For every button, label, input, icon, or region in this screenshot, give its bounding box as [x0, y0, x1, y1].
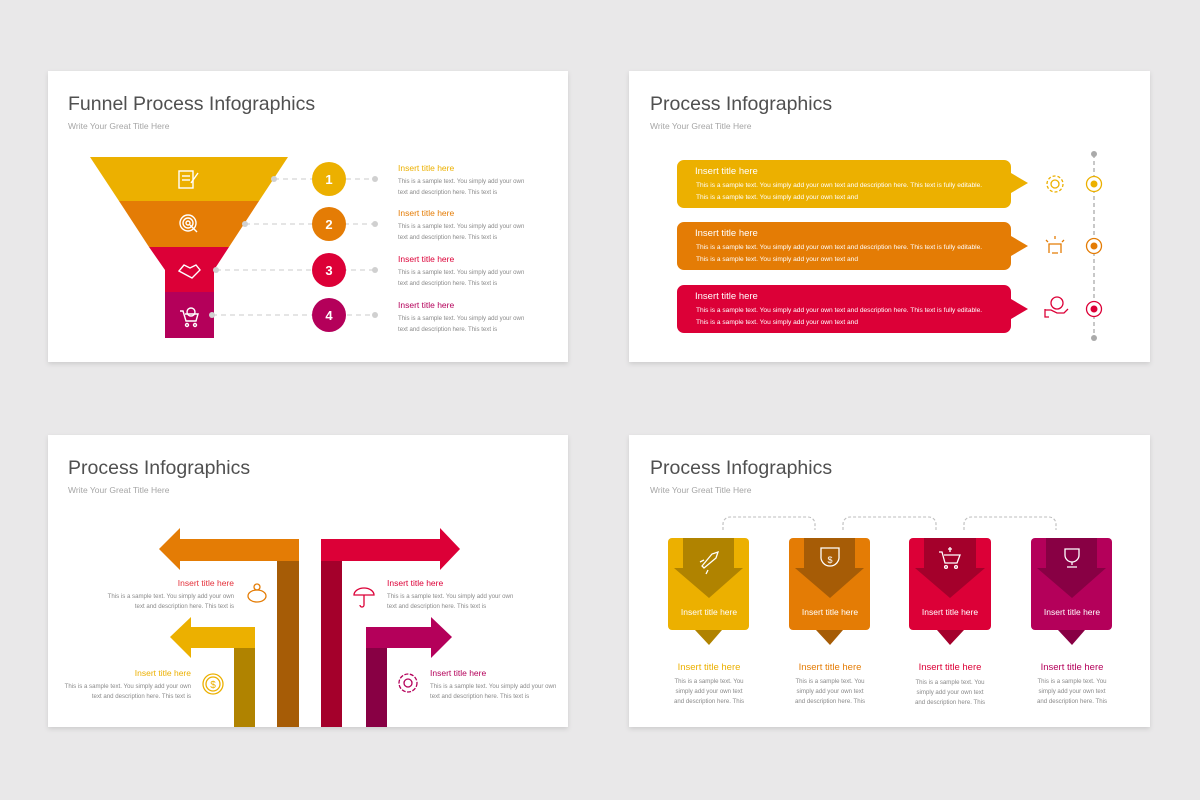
heading: arrows title [68, 457, 250, 495]
funnel text blocks: This is a sample text. You simply add your own [398, 315, 524, 322]
funnel text blocks: This is a sample text. You simply add your own [398, 269, 524, 276]
heading: cards title [650, 457, 832, 495]
arrow text blocks and icons: Insert title here [178, 578, 234, 588]
arrow shapes [159, 528, 460, 727]
panel: arrows process [48, 435, 568, 727]
callout boxes: This is a sample text. You simply add your own text and [696, 319, 858, 326]
card text blocks: and description here. This [674, 698, 744, 705]
cards: Insert title here [922, 607, 978, 617]
funnel text blocks: Insert title here [398, 163, 454, 173]
card text blocks: and description here. This [795, 698, 865, 705]
panel: card process [629, 435, 1150, 727]
arrow text blocks and icons: Insert title here [387, 578, 443, 588]
arrow text blocks and icons: This is a sample text. You simply add your own [65, 683, 191, 690]
heading: process title top right: Process Infographics [650, 93, 832, 115]
arrow text blocks and icons: Insert title here [135, 668, 191, 678]
cards: Insert title here [1044, 607, 1100, 617]
card text blocks: and description here. This [1037, 698, 1107, 705]
heading: process title top right [650, 93, 832, 131]
funnel text blocks: Insert title here [398, 254, 454, 264]
cards: Insert title here [681, 607, 737, 617]
callout boxes: This is a sample text. You simply add your own text and description here. This text is fully editable. [696, 244, 982, 251]
connectors and number circles [209, 162, 378, 332]
heading: funnel title: Write Your Great Title Here [68, 121, 170, 131]
card text blocks: Insert title here [678, 662, 740, 673]
card text blocks: simply add your own text [675, 688, 743, 695]
arrow text blocks and icons: $ [210, 680, 216, 691]
cards [668, 538, 1112, 645]
arrow text blocks and icons: text and description here. This text is [430, 693, 529, 700]
arrow text blocks and icons: text and description here. This text is [135, 603, 234, 610]
callout boxes: This is a sample text. You simply add your own text and [696, 194, 858, 201]
dashed connector arrows [723, 517, 1056, 530]
funnel text blocks: This is a sample text. You simply add your own [398, 178, 524, 185]
callout boxes [677, 160, 1028, 333]
funnel text blocks: text and description here. This text is [398, 234, 497, 241]
panel: funnel process [48, 71, 568, 362]
arrow text blocks and icons: This is a sample text. You simply add your own [430, 683, 556, 690]
cards: $ [827, 555, 833, 565]
heading: funnel title: Funnel Process Infographics [68, 93, 315, 115]
icons and timeline [1045, 151, 1102, 341]
card text blocks [674, 662, 1107, 706]
heading: funnel title [68, 93, 315, 131]
funnel text blocks: Insert title here [398, 208, 454, 218]
arrow text blocks and icons: This is a sample text. You simply add your own [108, 593, 234, 600]
card text blocks: This is a sample text. You [915, 679, 985, 686]
heading: process title top right: Write Your Great Title Here [650, 121, 752, 131]
connectors and number circles: 2 [325, 217, 333, 232]
arrow text blocks and icons: text and description here. This text is [387, 603, 486, 610]
card text blocks: Insert title here [1041, 662, 1103, 673]
connectors and number circles: 4 [325, 308, 333, 323]
funnel text blocks: text and description here. This text is [398, 189, 497, 196]
callout boxes: Insert title here [695, 166, 758, 177]
arrow text blocks and icons: Insert title here [430, 668, 486, 678]
card text blocks: This is a sample text. You [1037, 678, 1107, 685]
heading: arrows title: Write Your Great Title Here [68, 485, 170, 495]
card text blocks: simply add your own text [1038, 688, 1106, 695]
callout boxes: Insert title here [695, 291, 758, 302]
funnel text blocks: This is a sample text. You simply add your own [398, 223, 524, 230]
funnel text blocks: text and description here. This text is [398, 326, 497, 333]
card text blocks: Insert title here [919, 662, 981, 673]
card text blocks: This is a sample text. You [795, 678, 865, 685]
panel: callout process [629, 71, 1150, 362]
card text blocks: and description here. This [915, 699, 985, 706]
arrow text blocks and icons: text and description here. This text is [92, 693, 191, 700]
callout boxes: This is a sample text. You simply add your own text and description here. This text is fully editable. [696, 307, 982, 314]
callout boxes: Insert title here [695, 228, 758, 239]
card text blocks: simply add your own text [796, 688, 864, 695]
connectors and number circles: 1 [325, 172, 333, 187]
connectors and number circles: 3 [325, 263, 333, 278]
funnel text blocks: Insert title here [398, 300, 454, 310]
cards: Insert title here [802, 607, 858, 617]
card text blocks: Insert title here [799, 662, 861, 673]
funnel chart [90, 157, 288, 338]
card text blocks: This is a sample text. You [674, 678, 744, 685]
heading: arrows title: Process Infographics [68, 457, 250, 479]
arrow text blocks and icons: This is a sample text. You simply add your own [387, 593, 513, 600]
funnel text blocks [398, 163, 524, 333]
arrow text blocks and icons [65, 578, 556, 700]
funnel text blocks: text and description here. This text is [398, 280, 497, 287]
callout boxes: This is a sample text. You simply add your own text and description here. This text is fully editable. [696, 182, 982, 189]
callout boxes: This is a sample text. You simply add your own text and [696, 256, 858, 263]
heading: cards title: Process Infographics [650, 457, 832, 479]
heading: cards title: Write Your Great Title Here [650, 485, 752, 495]
card text blocks: simply add your own text [916, 689, 984, 696]
